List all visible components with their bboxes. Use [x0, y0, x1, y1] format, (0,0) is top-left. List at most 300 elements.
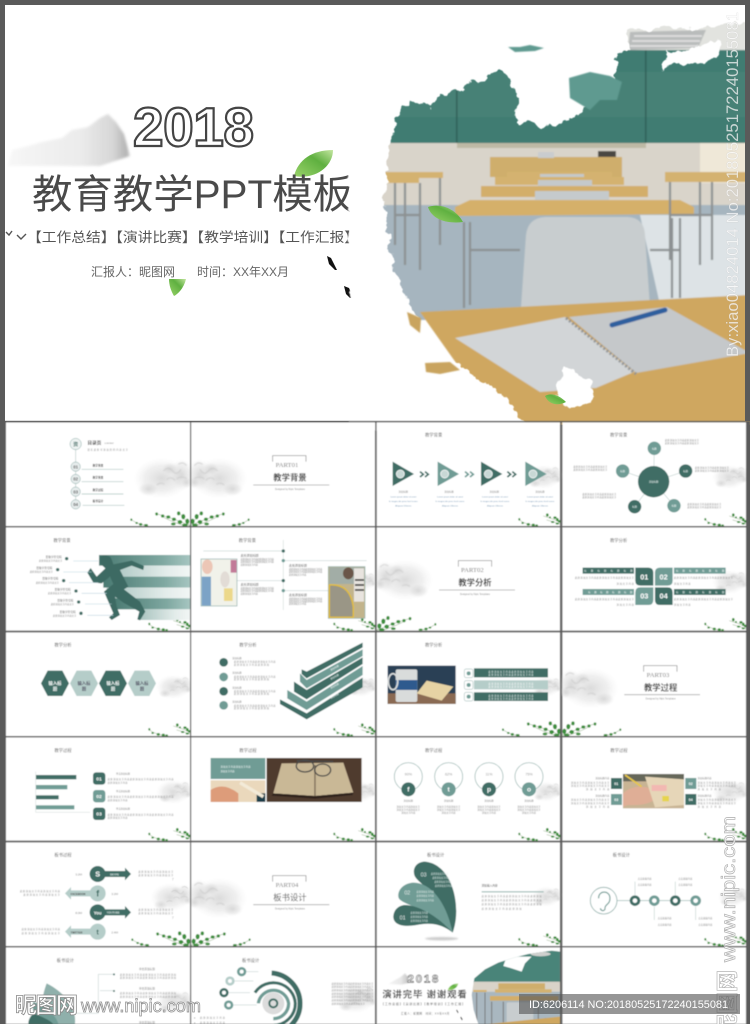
vertical photo id watermark: By:xiao04824014 No:20180525172240155081	[723, 12, 742, 357]
captions: 添加标题	[399, 490, 409, 494]
rings: t	[448, 787, 451, 794]
callout text: 添加标题内容	[595, 776, 610, 780]
hexagons: 题	[111, 687, 116, 693]
bullet circles	[219, 656, 276, 710]
pyramid: 添加标题	[329, 672, 340, 681]
values: 8.0M	[75, 911, 82, 915]
ring captions: 添加文字内容添加文字	[477, 804, 501, 808]
numbered list: 单击添加标题	[116, 807, 131, 811]
icon: leaf on desk	[428, 206, 463, 222]
slide: social arrows	[6, 842, 193, 946]
slide: central photo with callouts	[562, 737, 749, 841]
social rows: f	[96, 889, 100, 899]
social rows	[65, 866, 131, 940]
social rows: S	[95, 870, 100, 879]
rings: 62%	[445, 772, 453, 776]
captions: 添加标题	[444, 490, 454, 494]
node text: 点击直接内容	[678, 876, 693, 880]
quad captions: 添加文字内容	[617, 602, 635, 606]
petals: 此处添加文字内容	[435, 884, 453, 888]
social rows: t	[96, 927, 99, 936]
ring captions: 添加文字内容添加文字	[397, 804, 421, 808]
petal text: 此处添加文字内容此处添加文字内容此处添加	[482, 894, 542, 898]
slide: contents	[6, 422, 194, 526]
petals: 此处添加文字内容	[417, 898, 435, 902]
slide: blank final	[562, 947, 746, 1024]
slide: triangle process	[377, 422, 563, 526]
hexagons: 题	[82, 687, 87, 693]
ring captions: 添加文字内容添加文字	[477, 807, 501, 811]
bullet circles: 添加标题	[232, 656, 242, 660]
ring captions: 添加文字内容	[401, 810, 416, 814]
icon: birds	[6, 231, 26, 239]
node timeline	[617, 882, 701, 920]
bullet circles: 此处添加文字内容此处添加	[234, 706, 270, 710]
callout squares: 04	[689, 798, 694, 802]
label bars: 标题标题标题标题	[676, 569, 725, 573]
callout squares: 01	[614, 782, 618, 786]
bullet list: 此处添加文字内容文字	[48, 591, 72, 595]
slide: social arrows: 板书过程	[54, 852, 72, 859]
captions: Aliquam Ultricies	[395, 505, 411, 508]
closing year: 2018	[408, 973, 438, 985]
values: 3.2M	[111, 892, 118, 896]
quad captions	[575, 576, 734, 606]
social rows: FACEBOOK	[71, 892, 86, 896]
ring captions: 添加文字内容	[482, 810, 497, 814]
numbered list: 单击添加标题	[116, 789, 131, 793]
callout text: 添加文字内容添加文字内容文字	[698, 798, 737, 802]
slide: hub and spoke	[562, 422, 749, 526]
bullet list: 此处添加文字内容文字	[39, 559, 63, 563]
ring captions: 添加文字内容添加文字	[517, 804, 541, 808]
pyramid	[280, 643, 363, 719]
pyramid: 添加标题	[329, 681, 340, 690]
text blocks: 此处添加文字内容此处添加文字内容	[289, 599, 323, 603]
leaf text: 此处添加文字内容此处添加文字内容此处添加	[120, 976, 177, 980]
rings: 11%	[485, 772, 493, 776]
chevrons	[420, 472, 516, 477]
teal and ochre brush remnants	[407, 45, 622, 374]
motion stripes	[99, 555, 190, 620]
leaf text: 此处添加文字内容此处添加文字内容此处添加	[120, 994, 177, 998]
petals: 01	[400, 915, 406, 921]
contents list: 资	[73, 441, 78, 448]
captions: In magna ide penu henl eunec	[435, 501, 465, 503]
captions: Lorem ipsum dolor sit amet	[482, 495, 508, 498]
hub labels: 此处添加文字内容此处添加文字	[582, 495, 617, 499]
petal text: 此处添加文字内容此处添加	[482, 906, 522, 910]
petals: 此处添加文字内容	[434, 879, 452, 883]
slide: numbered quad	[562, 527, 749, 631]
values: 3.2M	[75, 872, 82, 876]
photo: mug and book	[388, 666, 456, 704]
subtitle tags: 【工作总结】【演讲比赛】【教学培训】【工作汇报】	[27, 230, 359, 245]
contents list: 目录页	[87, 439, 102, 446]
arc side text: 此处添加文字内容此处添加文字内容文字	[332, 988, 374, 992]
text blocks: 此处添加文字内容	[289, 602, 307, 606]
ring captions: 添加文字内容	[442, 810, 456, 814]
icons and bars: 此处添加文字内容此处添加文字内容	[488, 684, 534, 688]
slide: PART01 section: 教学背景	[273, 472, 307, 482]
captions: 添加标题	[535, 490, 545, 494]
slide: ear timeline	[562, 842, 748, 946]
separators	[0, 421, 750, 1024]
callout text: 添加文字内容添加文字内容文字	[571, 780, 610, 784]
ring captions: 添加文字内容添加文字	[397, 807, 421, 811]
contents list	[70, 438, 129, 509]
icons and bars: 此处添加文字内容此处添加文字内容	[488, 696, 534, 700]
slide: PART03 section: 教学过程	[644, 682, 678, 692]
callout text: 添加文字内容添加文字内容文字	[571, 801, 610, 805]
numbered list: 此处添加文字内容此处添加文字内容此处添加文字内容	[108, 812, 174, 816]
heading: 2018 outlined: 2018	[133, 96, 254, 158]
petal text: 添加输入内容	[482, 884, 498, 888]
captions: In magna ide penu henl eunec	[525, 501, 555, 503]
captions: Lorem ipsum dolor sit amet	[390, 495, 417, 498]
leaf text: 此处添加文字内容此处添加文字内容此处添加	[120, 972, 177, 976]
quad captions: 添加文字内容	[617, 581, 635, 585]
slide: runner infographic	[6, 527, 191, 631]
photo: students	[201, 559, 237, 606]
label bars: 标题标题标题标题	[588, 590, 633, 594]
numbered list: 03	[96, 812, 102, 818]
rings: 75%	[525, 772, 533, 776]
quad captions: 添加文字内容	[674, 602, 691, 606]
text blocks: 此处添加标题	[241, 582, 259, 587]
arc side text: 此处添加文字内容此处添加文字内容文字	[332, 998, 374, 1002]
bullet list: 形象字符号码	[42, 577, 59, 581]
callout text: 添加文字内容添加文字内容文字	[698, 801, 737, 805]
social rows: You	[94, 910, 102, 915]
bullet circles: 此处添加文字内容此处添加	[234, 662, 270, 666]
slide: hexagon chain	[6, 632, 193, 736]
numbered list: 01	[96, 776, 102, 782]
text blocks: 此处添加文字内容	[241, 562, 259, 566]
bullet list: 形象字符号码	[46, 555, 62, 559]
slide: timeline with photos: 教学背景	[239, 537, 257, 544]
petals: 此处添加文字内容	[417, 894, 435, 898]
captions: Lorem ipsum dolor sit amet	[437, 495, 463, 498]
node text: 点击直接内容	[658, 922, 672, 926]
quad blocks	[635, 568, 673, 605]
contents list: 01	[73, 464, 79, 469]
callout squares	[611, 778, 696, 805]
captions: Aliquam Ultricies	[487, 505, 503, 508]
quad captions: 此处添加文字内容此处添加文字内容此处添加文字	[575, 576, 635, 580]
hub labels: 此处添加文字内容此处添加文字	[695, 465, 730, 469]
brush mask	[350, 0, 750, 430]
hub labels: 此处添加文字内容此处添加文字	[573, 465, 608, 469]
closing tags: 【工作总结】【演讲比赛】【教学培训】【工作汇报】	[381, 1001, 465, 1006]
quad blocks: 01	[640, 572, 648, 581]
label bars: 标题标题标题标题	[584, 569, 633, 573]
bullet circles: 添加标题	[232, 685, 242, 689]
hub labels: 此处添加文字内容此处添加文字	[665, 438, 700, 442]
ring captions: 添加文字内容添加文字	[517, 807, 541, 811]
icons and bars: 此处添加文字内容此处添加文字内容	[488, 693, 534, 697]
slide: PART03 section: Designed by Nipic Templates	[646, 698, 676, 701]
callout text: 添加文字内容添加文字内容文字	[698, 780, 737, 784]
social captions: 此处添加文字内容添加文字内容	[20, 889, 61, 893]
rings: 90%	[405, 772, 413, 776]
hub labels: 此处添加文字内容此处添加文字	[687, 502, 722, 506]
social rows: SKYPE	[110, 872, 119, 876]
rings	[394, 763, 543, 796]
arc side text: 此处添加文字内容此处添加文字	[332, 1001, 366, 1005]
slide: PART04 section: PART04	[276, 882, 299, 889]
photo: writing hand	[211, 780, 265, 802]
quad captions: 此处添加文字内容此处添加文字内容此处添加文字	[674, 576, 734, 580]
bullet circles: 此处添加文字内容此处添加	[234, 677, 270, 681]
quad blocks: 03	[640, 591, 648, 600]
petals: 此处添加文字内容	[411, 911, 429, 915]
photo: hand on book	[623, 774, 684, 808]
social captions: 此处添加文字内容添加文字	[138, 873, 174, 877]
hub diagram	[616, 442, 692, 513]
contents list: 教学背景	[93, 463, 104, 467]
slide: petal diagram: 板书设计	[427, 852, 445, 859]
values: 2.4M	[111, 930, 118, 934]
slide: petal diagram	[377, 842, 562, 946]
bullet list: 此处添加文字内容文字	[30, 570, 54, 574]
petals: 此处添加文字内容	[431, 871, 449, 875]
hub labels: 此处添加文字内容此处添加文字	[665, 441, 700, 445]
ID bar	[519, 994, 740, 1014]
slide: stepped pyramid	[191, 632, 377, 736]
slide: hub and spoke: 教学背景	[610, 432, 628, 439]
photo: chair	[328, 567, 365, 618]
contents list: 请在此处可添加您的内容文字	[87, 448, 129, 452]
icon: leaf on table	[545, 394, 566, 404]
numbered list: 此处添加文字内容此处添加文字内容此处添加文字内容	[108, 795, 174, 799]
petals: 此处添加文字内容	[417, 889, 435, 893]
numbered list: 此处添加文字内容	[108, 816, 128, 820]
classroom photo	[350, 0, 750, 430]
hexagons	[41, 671, 156, 696]
rings: f	[407, 787, 410, 794]
hub labels: 此处添加文字内容此处添加文字	[573, 468, 608, 472]
slide: PART02 section	[372, 527, 560, 631]
bullet circles: 此处添加文字内容此处添加	[234, 692, 270, 696]
bullet list: 形象字符号码	[55, 587, 71, 591]
social captions: 此处添加文字内容添加文字	[138, 911, 174, 915]
node text: 点击直接内容	[698, 922, 713, 926]
text blocks: 此处添加文字内容	[241, 591, 259, 595]
slide: timeline with photos	[191, 527, 377, 631]
arc side text: 此处添加文字内容此处添加文字内容文字	[332, 995, 374, 999]
vertical site watermark: www.nipic.com	[719, 816, 740, 963]
callout text: 添加标题内容	[595, 793, 610, 797]
icon: ink specks closing	[456, 1009, 463, 1020]
closing reporter: 汇报人：昵图网 时间：XX年XX月	[401, 1012, 450, 1016]
bullet circles: 此处添加文字内容此处添加文字内容	[234, 660, 276, 664]
text blocks	[241, 553, 323, 606]
petals: 此处添加文字内容	[432, 875, 450, 879]
callout text: 添加文字内容	[698, 804, 722, 808]
petal text: 此处添加文字内容此处添加文字内容此处添加	[482, 898, 542, 902]
teal text tile	[211, 758, 265, 779]
hexagons: 输入标	[106, 680, 120, 687]
petals	[393, 862, 458, 940]
slide: percent rings: 教学过程	[425, 747, 443, 754]
numbered list: 单击添加标题	[116, 771, 131, 775]
text blocks: 此处添加文字内容此处添加文字内容	[241, 557, 275, 561]
slide: PART01 section	[187, 422, 375, 526]
hexagons: 输入标	[77, 680, 91, 687]
social captions: 此处添加文字内容添加文字	[138, 870, 174, 874]
captions: In magna ide penu henl eunec	[480, 501, 510, 503]
text blocks: 此处添加标题	[289, 563, 307, 568]
thumbnail slide grid	[0, 421, 750, 1024]
text blocks: 此处添加文字内容此处添加文字内容	[241, 560, 275, 564]
icon: small green leaf	[169, 279, 186, 296]
slide: PART04 section	[187, 842, 375, 946]
title: 教育教学PPT模板	[32, 173, 353, 217]
ID bar: ID:6206114 NO:20180525172240155081	[529, 999, 728, 1011]
captions: Aliquam Ultricies	[532, 505, 548, 508]
numbered list: 此处添加文字内容	[108, 798, 128, 802]
callout text: 添加文字内容	[698, 787, 722, 791]
leaf text: 此处添加文字内容此处添加文字内容此处添加	[120, 991, 177, 995]
leaf text	[113, 967, 177, 1024]
hub diagram: 添加标题	[649, 480, 659, 484]
contents list: 板书设计	[93, 499, 104, 503]
captions	[389, 490, 555, 508]
slide: PART02 section: PART02	[461, 567, 484, 574]
social rows: YOUTUBE	[107, 911, 120, 915]
quad blocks: 04	[660, 591, 669, 600]
numbered list	[93, 771, 174, 820]
closing title: 演讲完毕 谢谢观看	[382, 988, 467, 999]
slide: PART03 section	[558, 632, 746, 736]
slide: mug photo with bars	[377, 632, 562, 736]
pyramid: 添加标题	[329, 663, 340, 672]
brand watermark bottom left	[15, 993, 201, 1018]
ring captions: 添加标题	[404, 799, 414, 803]
bullet circles: 此处添加文字内容此处添加文字内容	[234, 689, 276, 693]
mini classroom photo	[470, 950, 562, 1024]
captions: Lorem ipsum dolor sit amet	[527, 495, 553, 498]
bar chart	[36, 772, 90, 812]
icons and bars	[464, 668, 548, 701]
bullet list: 形象字符号码	[36, 566, 53, 570]
bullet list: 此处添加文字内容文字	[51, 602, 75, 606]
hub diagram: 标题	[620, 469, 626, 473]
leaf text: 单击添加标题	[139, 986, 155, 990]
node text	[638, 876, 713, 926]
bullet circles: 此处添加文字内容此处添加文字内容	[234, 703, 276, 707]
callout text: 添加文字内容添加文字内容文字	[571, 784, 610, 788]
social captions: 此处添加文字内容添加文字	[23, 893, 61, 897]
teal text tile: 添加文字内容添加文字内容	[221, 764, 251, 768]
label bars	[583, 568, 726, 595]
captions: 添加标题	[490, 490, 500, 494]
hub diagram: 标题	[632, 505, 638, 509]
slide: concentric arcs: 板书设计	[242, 957, 260, 964]
slide: photo collage	[191, 737, 377, 841]
petal text	[482, 884, 544, 910]
social captions: 此处添加文字内容添加文字	[138, 908, 174, 912]
bullet list: 此处添加文字内容文字	[36, 580, 60, 584]
slide: hexagon chain: 教学分析	[54, 642, 72, 649]
ring captions: 添加文字内容	[522, 810, 537, 814]
social captions: 此处添加文字内容添加文字	[22, 931, 61, 935]
ring captions: 添加文字内容添加文字	[437, 804, 461, 808]
petals: 此处添加文字内容	[411, 919, 429, 923]
contents list: 教学过程	[93, 488, 104, 492]
bullet circles: 添加标题	[232, 700, 242, 704]
slide: runner infographic: 教学背景	[53, 537, 71, 544]
photo: open book with glasses	[267, 758, 362, 802]
ring captions: 添加文字内容添加文字	[437, 807, 461, 811]
slide: mug photo with bars: 教学分析	[425, 642, 443, 649]
leaf petals	[28, 983, 75, 1024]
ring captions: 添加标题	[444, 799, 454, 803]
slide: triangle process: 教学背景	[425, 432, 443, 439]
hub labels: 此处添加文字内容此处添加文字	[687, 505, 722, 509]
slide: PART01 section: PART01	[276, 462, 298, 469]
leaf text: 单击添加标题	[139, 967, 155, 971]
slide: concentric arcs	[191, 947, 378, 1024]
social captions	[20, 870, 175, 935]
panel: hero cover slide	[5, 0, 750, 430]
slide: PART01 section: Designed by Nipic Templates	[275, 488, 306, 491]
icon: ink specks	[327, 256, 354, 298]
petals: 02	[404, 890, 410, 896]
petal text: 此处添加文字内容此处添加文字内容此处添加	[482, 902, 542, 906]
callout text: 添加文字内容添加文字内容文字	[698, 784, 737, 788]
text blocks: 此处添加文字内容此处添加文字内容	[241, 589, 275, 593]
arc nodes	[194, 967, 258, 1024]
slide: stepped pyramid: 教学分析	[239, 642, 257, 649]
ring captions: 添加标题	[524, 799, 534, 803]
slide: thank you closing	[377, 947, 562, 1024]
icons and bars: 此处添加文字内容此处添加文字内容	[488, 672, 534, 676]
bullet list: 形象字符号码	[57, 598, 74, 602]
node text: 点击直接内容	[638, 876, 652, 880]
rings: p	[487, 787, 491, 794]
reporter line: 汇报人：昵图网	[91, 264, 175, 279]
triangles	[393, 462, 547, 486]
arc side text: 此处添加文字内容此处添加文字内容文字	[332, 981, 374, 985]
text blocks: 此处添加文字内容此处添加文字内容	[289, 596, 323, 600]
label bars: 标题标题标题标题	[676, 590, 725, 594]
brand watermark bottom left: www.nipic.com	[80, 996, 201, 1016]
quad captions: 此处添加文字内容此处添加文字内容此处添加文字	[674, 597, 734, 601]
arc side text: 此处添加文字内容此处添加文字内容文字	[332, 985, 374, 989]
callout text	[571, 776, 737, 808]
node text: 点击直接内容	[698, 916, 713, 920]
arcs	[255, 973, 300, 1024]
pyramid: 添加标题	[329, 691, 340, 700]
text blocks: 此处添加文字内容	[289, 572, 307, 576]
values	[75, 872, 118, 934]
hexagons: 输入标	[135, 680, 149, 687]
slide: PART04 section: Designed by Nipic Templates	[275, 908, 306, 911]
petals: 03	[421, 873, 427, 879]
social captions: 此处添加文字内容添加文字内容	[22, 927, 61, 931]
callout squares: 03	[614, 798, 618, 802]
text blocks: 此处添加标题	[289, 592, 307, 597]
captions: Aliquam Ultricies	[442, 505, 458, 508]
captions: In magna ide penu henl eunec	[389, 501, 419, 503]
hexagons: 题	[53, 687, 58, 693]
slide: photo collage: 教学过程	[239, 747, 257, 754]
hub labels: 此处添加文字内容此处添加文字	[582, 492, 617, 496]
numbered list: 此处添加文字内容	[108, 780, 128, 784]
contents list: 04	[73, 502, 79, 507]
